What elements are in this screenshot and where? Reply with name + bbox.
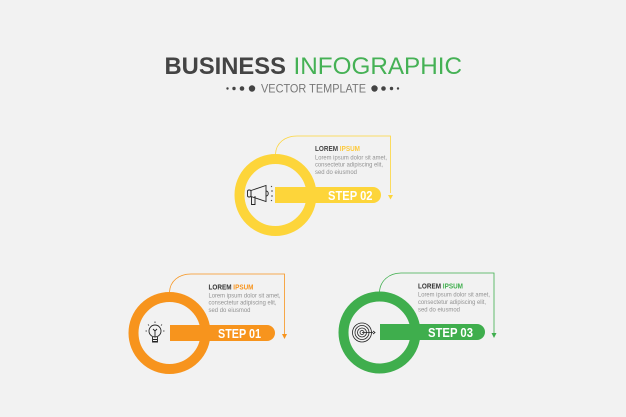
icon: megaphone xyxy=(248,186,273,204)
text block: step 02: consectetur adipiscing elit, xyxy=(315,163,383,169)
step bar: step 03 xyxy=(380,324,485,340)
subtitle with dots: VECTOR TEMPLATE xyxy=(261,84,366,96)
text block: step 03: consectetur adipiscing elit, xyxy=(418,300,486,306)
icon: light bulb xyxy=(146,322,164,342)
title xyxy=(164,53,462,80)
text block: step 01: consectetur adipiscing elit, xyxy=(208,301,277,307)
panel: step 01 xyxy=(134,274,287,369)
subtitle with dots xyxy=(226,84,399,96)
ring: step 02 xyxy=(240,159,312,231)
ring: step 03 xyxy=(344,296,416,368)
connector arrow: step 03 xyxy=(380,273,496,338)
panel: step 03 xyxy=(344,273,496,368)
step bar: step 01 xyxy=(170,325,275,341)
text block: step 03: LOREM IPSUM xyxy=(418,284,463,290)
text block: step 01: LOREM IPSUM xyxy=(208,284,254,291)
text block: step 03: sed do eiusmod xyxy=(418,307,460,313)
title: BUSINESS xyxy=(164,53,286,80)
icon: target xyxy=(352,323,375,342)
text block: step 01: sed do eiusmod xyxy=(208,308,250,314)
text block: step 03 xyxy=(418,284,490,313)
step bar: step 01: STEP 01 xyxy=(218,326,261,341)
panel: step 02 xyxy=(240,136,393,231)
text block: step 01 xyxy=(208,284,281,314)
title: INFOGRAPHIC xyxy=(294,53,462,80)
text block: step 01: Lorem ipsum dolor sit amet, xyxy=(208,294,281,300)
text block: step 02: sed do eiusmod xyxy=(315,170,357,176)
text block: step 02: Lorem ipsum dolor sit amet, xyxy=(315,155,387,161)
ring: step 01 xyxy=(134,297,206,369)
text block: step 03: Lorem ipsum dolor sit amet, xyxy=(418,293,490,299)
text block: step 02: LOREM IPSUM xyxy=(315,146,360,153)
connector arrow: step 01 xyxy=(170,274,287,339)
step bar: step 03: STEP 03 xyxy=(428,325,473,340)
step bar: step 02: STEP 02 xyxy=(328,188,372,203)
text block: step 02 xyxy=(315,146,387,176)
connector arrow: step 02 xyxy=(276,136,393,200)
step bar: step 02 xyxy=(275,187,381,203)
